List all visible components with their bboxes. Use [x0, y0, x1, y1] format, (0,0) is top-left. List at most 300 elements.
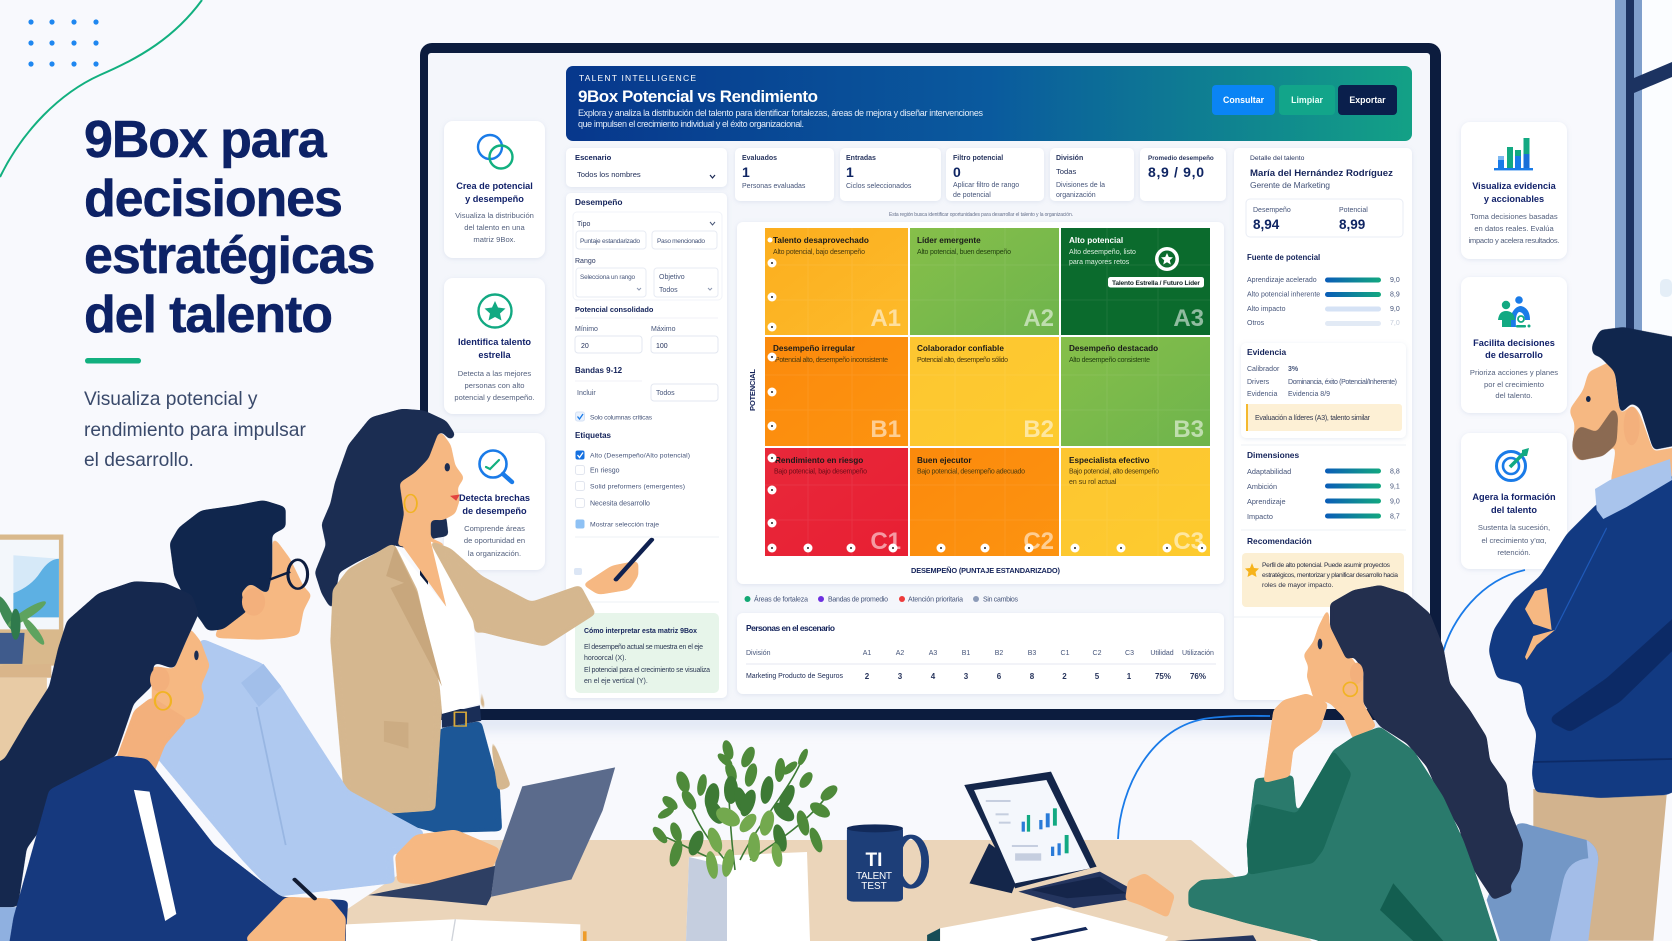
right feature cards [1461, 122, 1567, 569]
dashboard header banner: que impulsen el crecimiento individual y el éxito organizacional. [578, 119, 804, 129]
talent detail panel: Gerente de Marketing [1250, 180, 1330, 190]
evidence panel: 3% [1288, 366, 1299, 373]
mug [847, 824, 925, 902]
filters panel: Selecciona un rango [580, 274, 635, 281]
filters panel: Rango [575, 258, 596, 265]
cell C1: Rendimiento en riesgo [775, 456, 863, 465]
card: identifica talento [444, 278, 545, 414]
hand [246, 897, 346, 941]
dashboard header banner: Explora y analiza la distribución del talento para identificar fortalezas, áreas de mejora y diseñar intervenciones [578, 108, 984, 118]
card: visualiza evidencia [1461, 122, 1567, 259]
dashboard header banner: TALENT INTELLIGENCE [579, 73, 696, 83]
talent detail panel: 9,0 [1390, 277, 1400, 284]
talent detail panel: Otros [1247, 320, 1265, 327]
cell C2: Buen ejecutor [917, 456, 972, 465]
checkbox list [576, 450, 690, 528]
title: del talento [84, 286, 332, 344]
stems [660, 750, 829, 870]
table: personas en el escenario: A2 [896, 650, 904, 657]
filters panel: Paso mencionado [657, 238, 705, 245]
callout: how to interpret [575, 613, 719, 693]
evidence panel: Dominancia, éxito (Potencial/Inherente) [1288, 379, 1397, 386]
recommendation panel: Recomendación [1247, 536, 1312, 546]
filters panel: Etiquetas [575, 431, 612, 440]
callout: how to interpret: en el eje vertical (Y). [584, 678, 648, 685]
cell A3 [1061, 228, 1210, 335]
hair [1592, 327, 1672, 450]
cell C2 [910, 448, 1059, 556]
table: personas en el escenario: C3 [1125, 650, 1134, 657]
table: personas en el escenario: C2 [1093, 650, 1102, 657]
table: personas en el escenario: 8 [1030, 672, 1035, 681]
evidence panel: Drivers [1247, 379, 1270, 386]
talent detail panel: Alto potencial inherente [1247, 292, 1320, 298]
collar [1595, 459, 1672, 519]
callout: how to interpret: horoorcal (X). [584, 655, 626, 662]
cell B1: B1 [870, 416, 901, 443]
table: personas en el escenario: 5 [1095, 672, 1100, 681]
card: crea de potencial [444, 121, 545, 258]
matrix legend: Áreas de fortaleza [754, 594, 808, 604]
9box matrix panel [737, 222, 1224, 584]
title accent rule [85, 358, 141, 364]
card: detecta brechas [444, 433, 545, 570]
person: man with glasses [152, 500, 500, 897]
checkbox: solo columnas: Solo columnas críticas [590, 414, 653, 422]
matrix legend: Bandas de promedio [828, 596, 888, 604]
keyboard [1018, 872, 1146, 908]
cell A3: A3 [1173, 305, 1204, 332]
card: visualiza evidencia: Visualiza evidencia [1472, 181, 1557, 191]
title: 9Box para [84, 111, 328, 169]
notebook: right [927, 907, 1256, 941]
cell A1: A1 [870, 305, 901, 332]
talent detail panel: Potencial [1339, 207, 1368, 214]
cell B3: Desempeño destacado [1069, 344, 1158, 353]
shirt shading [1247, 750, 1352, 875]
dimensions panel: 8,7 [1390, 514, 1400, 520]
kpi: evaluados [735, 148, 834, 201]
table: personas en el escenario: 3 [898, 672, 903, 681]
table: personas en el escenario: B2 [995, 650, 1003, 657]
cell A3: Alto desempeño, listo [1069, 249, 1136, 256]
mug: TALENT [856, 871, 892, 882]
dot grid [28, 19, 99, 67]
card: facilita decisiones: por el crecimiento [1484, 380, 1544, 389]
talent detail panel [1246, 155, 1403, 327]
card: facilita decisiones: de desarrollo [1485, 350, 1543, 360]
screen charts [1022, 808, 1069, 856]
cell C1: Bajo potencial, bajo desempeño [774, 468, 867, 476]
evidence panel: Evidencia [1247, 347, 1286, 357]
filters panel: Todos [659, 287, 678, 294]
card: agera la formacion: Agera la formación [1472, 492, 1556, 502]
tablet [964, 772, 1146, 908]
filters panel: Incluir [577, 390, 596, 397]
scenario selector panel [566, 148, 727, 187]
cell A2: Líder emergente [917, 236, 981, 245]
shirt [134, 790, 176, 921]
filters panel: Máximo [651, 326, 676, 333]
filters panel: Puntaje estandarizado [580, 238, 640, 245]
evidence panel [1241, 343, 1406, 438]
talent detail panel: 8,99 [1339, 217, 1365, 232]
sweater [1488, 468, 1672, 798]
jacket [4, 755, 348, 941]
stand [969, 843, 1022, 893]
button: exportar [1338, 85, 1397, 115]
kpi: division: División [1056, 155, 1083, 162]
card: visualiza evidencia: y accionables [1484, 194, 1544, 204]
table: personas en el escenario: A1 [863, 650, 871, 657]
laptop: left [368, 767, 615, 905]
neck [116, 697, 187, 790]
card: detecta brechas: Comprende áreas [464, 524, 525, 533]
axis: desempeno: DESEMPEÑO (PUNTAJE ESTANDARIZADO) [911, 566, 1061, 575]
callout: how to interpret: El potencial para el crecimiento se visualiza [584, 667, 710, 674]
monitor frame [420, 43, 1441, 720]
hand [395, 830, 500, 886]
person: seated woman left [0, 581, 348, 941]
table: personas en el escenario: Personas en el escenario [746, 623, 835, 633]
card: visualiza evidencia: en datos reales. Evalúa [1474, 224, 1554, 233]
pot [686, 852, 810, 941]
monitor shadow [430, 716, 1430, 730]
talent detail panel: 7,0 [1390, 320, 1400, 327]
face and neck [1568, 360, 1672, 486]
card: agera la formacion: el crecimiento y'αα, [1481, 536, 1547, 545]
talent detail panel: Detalle del talento [1250, 155, 1305, 162]
scenario selector panel: Escenario [575, 153, 612, 162]
subtitle: el desarrollo. [84, 450, 194, 471]
filters panel: Bandas 9-12 [575, 366, 623, 375]
talent detail panel: 9,0 [1390, 306, 1400, 313]
card: identifica talento: personas con alto [465, 381, 524, 390]
table: personas en el escenario: Marketing Producto de Seguros [746, 673, 844, 680]
talent detail panel: 8,9 [1390, 292, 1400, 298]
cell C1 [765, 448, 908, 556]
matrix legend: Sin cambios [983, 596, 1018, 604]
dimensions panel [1241, 445, 1406, 521]
table: personas en el escenario: 2 [865, 672, 870, 681]
button: exportar: Exportar [1349, 95, 1386, 105]
notebook: left [346, 919, 587, 941]
kpi: filtro potencial: 0 [953, 164, 961, 180]
shirt [152, 638, 424, 897]
card: crea de potencial: del talento en una [464, 223, 525, 232]
screen [964, 772, 1097, 888]
cell A2: A2 [1023, 305, 1054, 332]
dimensions panel: Ambición [1247, 482, 1277, 491]
table: personas en el escenario: 3 [964, 672, 969, 681]
blouse [395, 541, 480, 714]
button: consultar [1212, 85, 1275, 115]
kpi: promedio: Promedio desempeño [1148, 155, 1214, 162]
table: personas en el escenario: Utilidad [1150, 650, 1174, 657]
cell C3 [1061, 448, 1210, 556]
card: detecta brechas: la organización. [468, 549, 521, 558]
table: personas en el escenario: 75% [1155, 672, 1171, 681]
hand at chin [1263, 693, 1328, 783]
table: personas en el escenario: 2 [1062, 672, 1067, 681]
card: agera la formacion: del talento [1491, 505, 1537, 515]
dashboard header banner: 9Box Potencial vs Rendimiento [578, 87, 818, 106]
table: personas en el escenario [737, 613, 1224, 694]
hair [315, 409, 455, 612]
axis: potencial: POTENCIAL [748, 369, 757, 411]
dashboard header banner [566, 66, 1412, 141]
cell A2: Alto potencial, buen desempeño [917, 249, 1011, 256]
kpi: division: Todas [1056, 167, 1076, 176]
kpi: entradas: 1 [846, 164, 854, 180]
person: standing man [1488, 327, 1672, 941]
icon: star badge [1155, 247, 1179, 271]
belt [442, 705, 481, 728]
recommendation panel: Perfil de alto potencial. Puede asumir proyectos [1262, 562, 1391, 569]
dimensions panel: 9,0 [1390, 498, 1400, 506]
talent detail panel: Alto impacto [1247, 306, 1286, 313]
talent detail panel: Desempeño [1253, 207, 1291, 214]
chair [0, 907, 18, 941]
card: crea de potencial: Crea de potencial [456, 181, 533, 191]
card: agera la formacion: retención. [1497, 548, 1531, 557]
checkbox list: Solid preformers (emergentes) [590, 484, 685, 490]
dimensions panel: Impacto [1247, 512, 1273, 521]
button: limpiar: Limpiar [1291, 95, 1323, 105]
cell B1 [765, 337, 908, 446]
cell B3: B3 [1173, 416, 1204, 443]
matrix data points [768, 238, 1206, 552]
kpi: filtro potencial: Aplicar filtro de rango [953, 182, 1019, 189]
checkbox list: Alto (Desempeño/Alto potencial) [590, 452, 690, 460]
callout: how to interpret: El desempeño actual se muestra en el eje [584, 644, 703, 651]
card: detecta brechas: Detecta brechas [459, 493, 530, 503]
table: personas en el escenario: B3 [1028, 650, 1036, 657]
card: agera la formacion: Sustenta la sucesión, [1478, 523, 1550, 532]
filters panel: Tipo [577, 221, 590, 228]
checkbox: solo columnas [576, 412, 653, 422]
kpi: evaluados: 1 [742, 164, 750, 180]
chair: right [1487, 823, 1598, 941]
filters panel: Desempeño [575, 197, 622, 207]
folded hands [1525, 588, 1552, 630]
card: agera la formacion [1461, 433, 1567, 569]
evidence panel: Calibrador [1247, 366, 1280, 373]
person: seated woman right [1188, 585, 1523, 941]
cell C2: C2 [1023, 528, 1054, 555]
jacket lapel [386, 547, 442, 686]
cell C3: Especialista efectivo [1069, 456, 1150, 465]
callout: how to interpret: Cómo interpretar esta matriz 9Box [584, 628, 697, 635]
table: personas en el escenario: 76% [1190, 672, 1206, 681]
cell C3: en su rol actual [1069, 479, 1117, 486]
evidence panel: Evidencia 8/9 [1288, 391, 1330, 398]
kpi: evaluados: Personas evaluadas [742, 183, 806, 190]
checkbox list: Mostrar selección traje [590, 522, 659, 528]
window frame [1615, 0, 1672, 335]
card: identifica talento: potencial y desempeño. [454, 393, 535, 402]
cell C2: Bajo potencial, desempeño adecuado [917, 468, 1025, 476]
cell B3: Alto desempeño consistente [1069, 357, 1150, 364]
KPI row [735, 148, 1226, 201]
cell B2: B2 [1023, 416, 1054, 443]
filters panel: Mínimo [575, 326, 598, 333]
recommendation panel: roles de mayor impacto. [1262, 582, 1334, 589]
card: facilita decisiones: Prioriza acciones y planes [1470, 368, 1558, 377]
cell B1: Potencial alto, desempeño inconsistente [775, 357, 888, 364]
potted plant [650, 739, 840, 941]
pants [357, 721, 502, 833]
dimensions panel: Aprendizaje [1247, 497, 1286, 506]
shirt [1188, 727, 1507, 941]
label: talento estrella [1108, 277, 1204, 288]
kpi: entradas: Entradas [846, 155, 876, 162]
filters panel: 20 [581, 343, 589, 350]
title [84, 111, 374, 344]
cell B2 [910, 337, 1059, 446]
hair [1330, 585, 1523, 900]
tablet hand [1125, 873, 1175, 918]
cell C3: C3 [1173, 528, 1204, 555]
cell A1: Talento desaprovechado [773, 236, 869, 245]
person: presenter [315, 409, 652, 833]
face [152, 624, 210, 720]
kpi: division [1050, 148, 1134, 201]
jacket left [330, 543, 442, 814]
kpi: promedio: 8,9 / 9,0 [1148, 164, 1204, 180]
card: detecta brechas: de oportunidad en [464, 536, 525, 545]
pen [295, 880, 315, 899]
hair [0, 581, 199, 907]
face and neck [1303, 607, 1377, 740]
filters panel: 100 [656, 343, 668, 350]
table: personas en el escenario: División [746, 650, 771, 657]
table: personas en el escenario: C1 [1061, 650, 1070, 657]
label: talento estrella: Talento Estrella / Futuro Líder [1112, 280, 1200, 287]
cell B2: Colaborador confiable [917, 344, 1004, 353]
title: decisiones [84, 170, 342, 228]
table: personas en el escenario: 4 [931, 672, 936, 681]
leaves [650, 739, 840, 868]
kpi: filtro potencial [946, 148, 1044, 201]
recommendation panel [1241, 530, 1406, 607]
kpi: entradas [840, 148, 941, 201]
filters panel: Potencial consolidado [575, 305, 654, 314]
card: visualiza evidencia: Toma decisiones basadas [1470, 212, 1558, 221]
card: identifica talento: Detecta a las mejores [458, 369, 531, 378]
kpi: entradas: Ciclos seleccionados [846, 183, 912, 190]
button: limpiar [1279, 85, 1335, 115]
table: personas en el escenario: 6 [997, 672, 1002, 681]
cell C3: Bajo potencial, alto desempeño [1069, 468, 1159, 476]
cell A2 [910, 228, 1059, 335]
matrix note: Esta región busca identificar oportunidades para desarrollar el talento y la organización. [889, 212, 1073, 218]
decorative green curve [0, 0, 202, 177]
talent detail panel: Aprendizaje acelerado [1247, 277, 1317, 284]
decorative blue arcs [1118, 570, 1525, 839]
cell A1: Alto potencial, bajo desempeño [773, 249, 865, 256]
left feature cards [444, 121, 545, 570]
checkbox list: Necesita desarrollo [590, 500, 650, 508]
kpi: filtro potencial: Filtro potencial [953, 155, 1003, 162]
title: estratégicas [84, 227, 374, 285]
cell B1: Desempeño irregular [773, 344, 856, 353]
cell A1 [765, 228, 908, 335]
table top [300, 840, 1312, 941]
hand with pen [583, 560, 638, 595]
card: detecta brechas: de desempeño [462, 506, 527, 516]
filters panel [566, 193, 727, 698]
subtitle: Visualiza potencial y [84, 389, 258, 410]
subtitle [84, 389, 306, 471]
subtitle: rendimiento para impulsar [84, 420, 306, 441]
wall picture and plant [0, 535, 63, 781]
kpi: division: organización [1056, 192, 1096, 199]
kpi: evaluados: Evaluados [742, 155, 777, 162]
mug: TI [866, 850, 882, 871]
card: crea de potencial: matriz 9Box. [473, 235, 516, 244]
matrix legend [744, 594, 1018, 604]
evidence panel: Evidencia [1247, 391, 1277, 398]
card: identifica talento: estrella [478, 350, 511, 360]
talent detail panel: 8,94 [1253, 217, 1280, 232]
filters panel: Objetivo [659, 274, 685, 281]
pants [1533, 789, 1667, 941]
dimensions panel: Adaptabilidad [1247, 467, 1291, 476]
table: personas en el escenario: B1 [962, 650, 970, 657]
face [214, 535, 312, 640]
cell B2: Potencial alto, desempeño sólido [917, 357, 1008, 364]
neck V [402, 540, 446, 607]
card: facilita decisiones: del talento. [1495, 391, 1533, 400]
hair [170, 500, 286, 631]
scenario selector panel: Todos los nombres [577, 170, 641, 179]
jacket right [429, 540, 596, 792]
dimensions panel: Dimensiones [1247, 450, 1299, 460]
table: personas en el escenario: 1 [1127, 672, 1132, 681]
card: identifica talento: Identifica talento [458, 337, 531, 347]
kpi: promedio [1140, 148, 1226, 201]
kpi: division: Divisiones de la [1056, 182, 1105, 189]
table: personas en el escenario: A3 [929, 650, 937, 657]
matrix grid lines [765, 228, 1210, 556]
card: crea de potencial: y desempeño [465, 194, 524, 204]
mug: TEST [861, 881, 887, 892]
matrix legend: Atención prioritaria [908, 596, 963, 604]
card: crea de potencial: Visualiza la distribución [455, 211, 534, 220]
glasses [270, 560, 308, 589]
dimensions panel: 8,8 [1390, 468, 1400, 476]
card: visualiza evidencia: impacto y acelera resultados. [1468, 236, 1560, 245]
kpi: filtro potencial: de potencial [953, 192, 991, 199]
talent detail panel: María del Hernández Rodríguez [1250, 168, 1393, 179]
checkbox list: En riesgo [590, 468, 620, 474]
cell C1: C1 [870, 528, 901, 555]
cell A3: Alto potencial [1069, 236, 1123, 245]
card: facilita decisiones [1461, 277, 1567, 413]
right column base [1234, 148, 1412, 700]
cell B3 [1061, 337, 1210, 446]
card: facilita decisiones: Facilita decisiones [1473, 338, 1555, 348]
table: personas en el escenario: Utilización [1182, 650, 1214, 657]
talent detail panel: Fuente de potencial [1247, 253, 1320, 262]
button: consultar: Consultar [1223, 95, 1265, 105]
recommendation panel: estratégicos, mentorizar y planificar desarrollo hacia [1262, 572, 1398, 579]
face [397, 429, 464, 547]
evidence panel: Evaluación a líderes (A3), talento similar [1255, 415, 1371, 422]
beard [1572, 408, 1618, 461]
monitor screen [428, 53, 1430, 709]
